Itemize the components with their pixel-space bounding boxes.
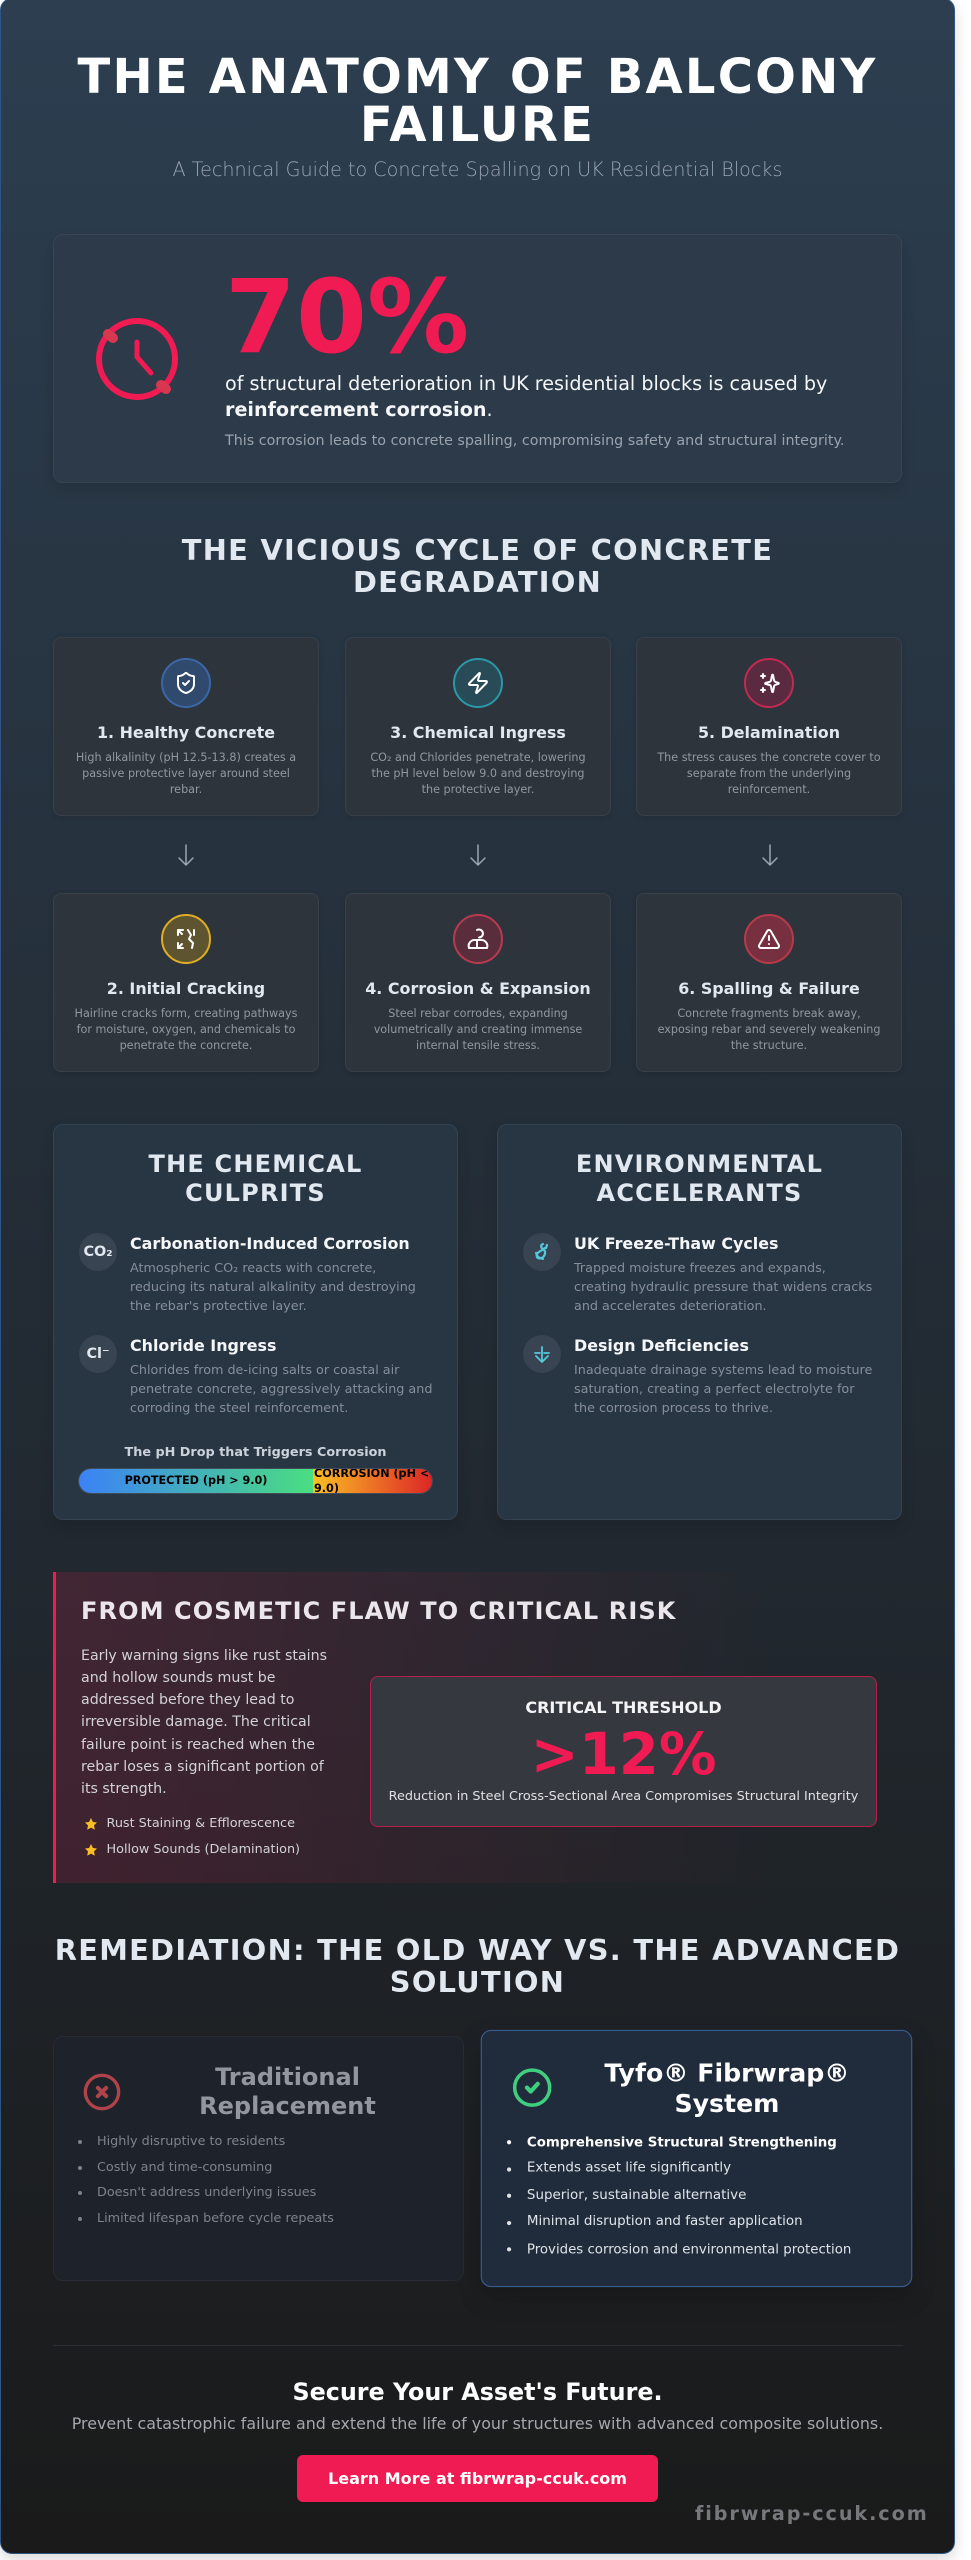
step title: 3. Chemical Ingress [390, 723, 566, 742]
icon: chloride: Cl⁻ [86, 1346, 110, 1362]
step card 4 [345, 893, 611, 1072]
explanatory paragraph: and hollow sounds must be [81, 1670, 276, 1686]
step text [370, 751, 586, 796]
item title: Chloride Ingress [130, 1336, 276, 1355]
icon: x circle [84, 2074, 120, 2110]
step text: rebar. [170, 783, 202, 796]
title [78, 49, 877, 153]
arrow: step 1 to 2 [178, 844, 194, 866]
step text [75, 1007, 297, 1052]
item text: saturation, creating a perfect electrolyte for [574, 1382, 854, 1397]
icon: check circle [512, 2068, 552, 2107]
icon: bolt [453, 658, 503, 708]
benefit list: Comprehensive Structural Strengthening [527, 2133, 837, 2149]
panel heading: ENVIRONMENTAL [576, 1150, 823, 1178]
step text: reinforcement. [728, 783, 810, 796]
panel heading: ACCELERANTS [597, 1179, 802, 1207]
icon: CO2 [79, 1233, 117, 1271]
panel: traditional replacement [53, 2036, 464, 2281]
statistic description: of structural deterioration in UK residential blocks is caused by [225, 372, 827, 395]
step text: the protective layer. [422, 783, 534, 796]
step text [374, 1007, 582, 1052]
icon: chloride [79, 1335, 117, 1373]
step text: High alkalinity (pH 12.5-13.8) creates a [76, 751, 296, 764]
threshold value: >12% [530, 1721, 717, 1788]
step title: 1. Healthy Concrete [97, 723, 275, 742]
icon: cracking arrows [161, 914, 211, 964]
threshold label: CRITICAL THRESHOLD [525, 1698, 722, 1717]
heading: vicious cycle: DEGRADATION [353, 565, 602, 599]
explanatory paragraph: addressed before they lead to [81, 1692, 294, 1708]
benefit list: Minimal disruption and faster application [527, 2214, 803, 2230]
icon: warning triangle [744, 914, 794, 964]
item title: Design Deficiencies [574, 1336, 749, 1355]
warning sign 2 [85, 1842, 300, 1856]
step text: passive protective layer around steel [82, 767, 290, 780]
icon: star [85, 1844, 97, 1856]
title: THE ANATOMY OF BALCONY [78, 49, 877, 105]
step text: Steel rebar corrodes, expanding [388, 1007, 568, 1020]
step text: the structure. [731, 1039, 807, 1052]
big number 70%: 70% [225, 258, 469, 377]
explanatory paragraph: its strength. [81, 1781, 167, 1797]
protected segment [79, 1469, 313, 1493]
explanatory paragraph: irreversible damage. The critical [81, 1714, 311, 1730]
icon: CO2: CO₂ [83, 1244, 113, 1260]
item text: creating hydraulic pressure that widens cracks [574, 1280, 872, 1295]
benefit list: Superior, sustainable alternative [527, 2187, 746, 2203]
sign label: Rust Staining & Efflorescence [106, 1816, 295, 1830]
step text: The stress causes the concrete cover to [657, 751, 881, 764]
step title: 5. Delamination [698, 723, 840, 742]
card heading: Tyfo® Fibrwrap® [604, 2058, 850, 2088]
title: FAILURE [360, 97, 595, 153]
statistic note: This corrosion leads to concrete spalling, compromising safety and structural integrity. [225, 433, 844, 449]
critical threshold box [370, 1676, 877, 1827]
step text: Hairline cracks form, creating pathways [75, 1007, 297, 1020]
explanatory paragraph: rebar loses a significant portion of [81, 1759, 324, 1775]
icon: clock [96, 318, 178, 400]
benefit list [506, 2133, 851, 2256]
card heading [199, 2062, 376, 2120]
button [297, 2455, 658, 2502]
warning sign 1 [85, 1816, 295, 1830]
statistic description [225, 372, 827, 421]
step title: 2. Initial Cracking [107, 979, 265, 998]
heading: remediation: SOLUTION [390, 1965, 565, 1999]
icon: star [85, 1818, 97, 1830]
heading: remediation [55, 1933, 900, 1999]
step text: exposing rebar and severely weakening [658, 1023, 880, 1036]
panel: 70% statistic [53, 234, 902, 483]
explanatory paragraph: failure point is reached when the [81, 1737, 315, 1753]
pH gradient bar [79, 1469, 432, 1493]
protected segment: PROTECTED (pH > 9.0) [125, 1474, 267, 1487]
step text: the pH level below 9.0 and destroying [371, 767, 585, 780]
step text: CO₂ and Chlorides penetrate, lowering [370, 751, 586, 764]
step text [658, 1007, 880, 1052]
benefit list: Extends asset life significantly [527, 2160, 731, 2176]
step title: 6. Spalling & Failure [678, 979, 860, 998]
item text: Trapped moisture freezes and expands, [574, 1261, 826, 1276]
item text: reducing its natural alkalinity and destroying [130, 1280, 416, 1295]
drawback list: Highly disruptive to residents [97, 2134, 285, 2149]
card heading: Traditional [215, 2062, 360, 2090]
step card 6 [636, 893, 902, 1072]
drawback list [78, 2134, 334, 2226]
heading: remediation: REMEDIATION: THE OLD WAY VS. THE ADVANCED [55, 1933, 900, 1967]
panel: environmental accelerants [497, 1124, 902, 1520]
panel: Tyfo Fibrwrap system [481, 2030, 912, 2287]
explanatory paragraph: Early warning signs like rust stains [81, 1648, 327, 1664]
arrow: step 3 to 4 [470, 844, 486, 866]
item text: Atmospheric CO₂ reacts with concrete, [130, 1261, 376, 1276]
subtitle: A Technical Guide to Concrete Spalling on UK Residential Blocks [172, 158, 782, 181]
pH chart title: The pH Drop that Triggers Corrosion [124, 1445, 386, 1460]
step text [76, 751, 296, 796]
statistic description: reinforcement corrosion. [225, 398, 493, 421]
item title: UK Freeze-Thaw Cycles [574, 1234, 778, 1253]
icon: sparkles [744, 658, 794, 708]
section heading: FROM COSMETIC FLAW TO CRITICAL RISK [81, 1597, 676, 1625]
icon: shield [161, 658, 211, 708]
item text [130, 1363, 432, 1416]
item text: penetrate concrete, aggressively attacking and [130, 1382, 432, 1397]
button: Learn More at fibrwrap-ccuk.com [328, 2469, 627, 2488]
heading: vicious cycle [182, 533, 773, 599]
icon: freeze-thaw [523, 1233, 561, 1271]
sign label: Hollow Sounds (Delamination) [106, 1842, 300, 1856]
card heading: System [674, 2089, 779, 2118]
drawback list: Doesn't address underlying issues [97, 2185, 316, 2200]
panel heading [576, 1150, 823, 1207]
call to action heading: Secure Your Asset's Future. [292, 2378, 663, 2406]
item text: Chlorides from de-icing salts or coastal air [130, 1363, 399, 1378]
item text: corroding the steel reinforcement. [130, 1401, 348, 1416]
step title: 4. Corrosion & Expansion [365, 979, 591, 998]
item text [574, 1261, 872, 1314]
explanatory paragraph [81, 1648, 327, 1797]
arrow: step 5 to 6 [762, 844, 778, 866]
threshold caption: Reduction in Steel Cross-Sectional Area Compromises Structural Integrity [389, 1789, 858, 1804]
icon: drainage [523, 1335, 561, 1373]
step text: separate from the underlying [687, 767, 851, 780]
item text: the rebar's protective layer. [130, 1299, 307, 1314]
item text: the corrosion process to thrive. [574, 1401, 773, 1416]
call to action text: Prevent catastrophic failure and extend the life of your structures with advanced composite solutions. [72, 2414, 883, 2433]
step text [657, 751, 881, 796]
card heading: Replacement [199, 2092, 376, 2120]
step text: for moisture, oxygen, and chemicals to [77, 1023, 295, 1036]
step text: internal tensile stress. [416, 1039, 540, 1052]
panel heading: CULPRITS [185, 1179, 326, 1207]
step card 1 [53, 637, 319, 816]
panel: critical risk [53, 1572, 902, 1883]
corrosion segment [313, 1469, 432, 1493]
drawback list: Limited lifespan before cycle repeats [97, 2211, 334, 2226]
step card 2 [53, 893, 319, 1072]
heading: vicious cycle: THE VICIOUS CYCLE OF CONCRETE [182, 533, 773, 567]
item text [574, 1363, 872, 1416]
item text: and accelerates deterioration. [574, 1299, 767, 1314]
step text: volumetrically and creating immense [374, 1023, 582, 1036]
card heading [604, 2058, 850, 2118]
item text [130, 1261, 416, 1314]
panel: chemical culprits [53, 1124, 458, 1520]
step card 3 [345, 637, 611, 816]
benefit list: Provides corrosion and environmental protection [527, 2240, 851, 2256]
item title: Carbonation-Induced Corrosion [130, 1234, 410, 1253]
step text: Concrete fragments break away, [677, 1007, 861, 1020]
panel heading [148, 1150, 362, 1207]
watermark url: fibrwrap-ccuk.com [695, 2502, 929, 2525]
step text: penetrate the concrete. [120, 1039, 252, 1052]
drawback list: Costly and time-consuming [97, 2160, 272, 2175]
step card 5 [636, 637, 902, 816]
item text: Inadequate drainage systems lead to moisture [574, 1363, 872, 1378]
panel heading: THE CHEMICAL [148, 1150, 362, 1178]
icon: corrosion [453, 914, 503, 964]
